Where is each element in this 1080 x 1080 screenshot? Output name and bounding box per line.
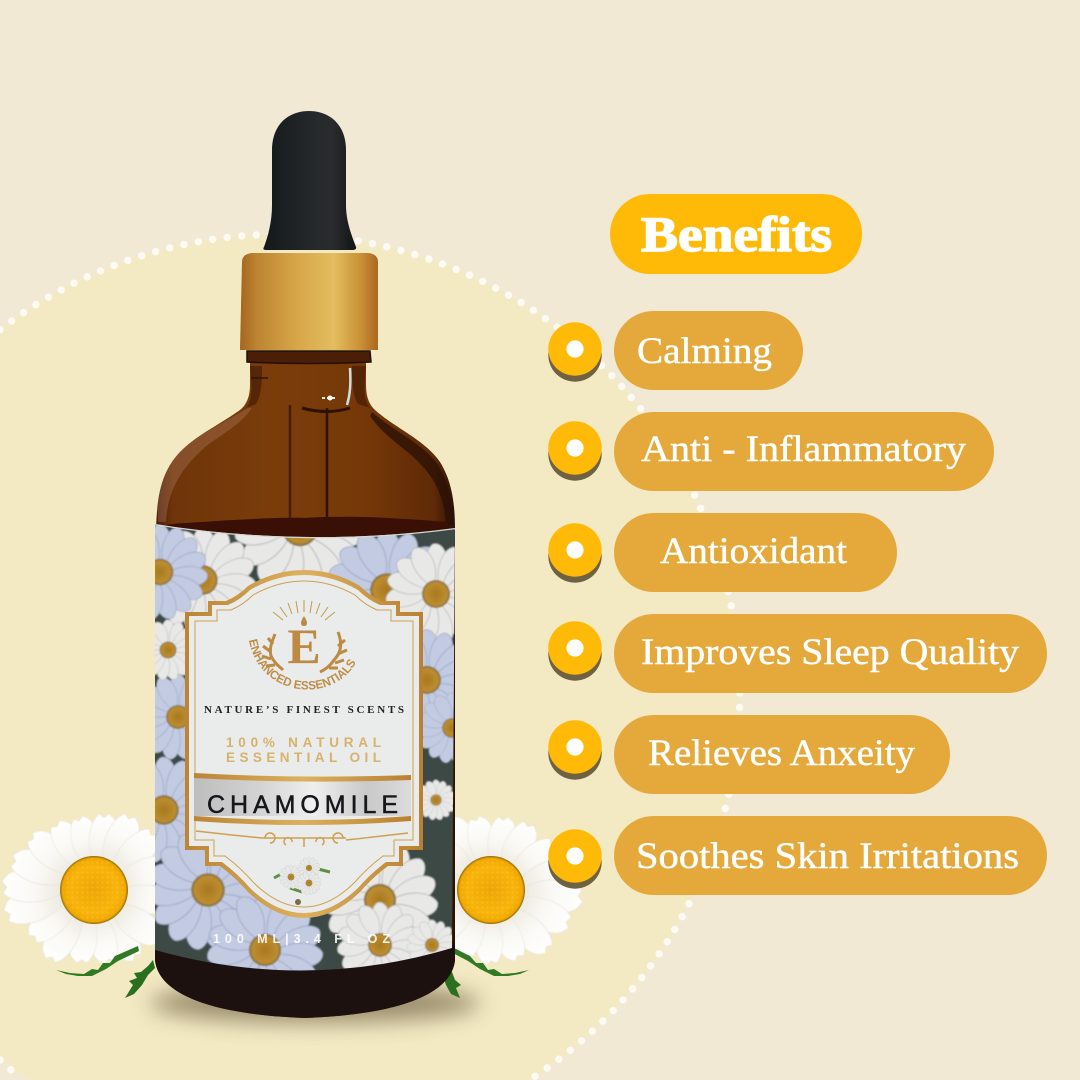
label: Calming — [637, 331, 772, 372]
benefit: relieves anxiety — [548, 715, 950, 794]
plaque label — [185, 570, 423, 918]
label: Antioxidant — [660, 531, 848, 572]
stem and leaf left — [56, 946, 155, 998]
gold ornament — [196, 831, 408, 847]
heading: benefits — [610, 194, 862, 274]
glass body — [155, 363, 455, 1018]
tagline: NATURE’S FINEST SCENTS — [204, 704, 404, 716]
benefit: anti-inflammatory — [548, 412, 994, 491]
benefit: improves sleep quality — [548, 614, 1047, 693]
benefit: antioxidant — [548, 513, 897, 592]
label: Relieves Anxeity — [648, 733, 916, 774]
petals left — [0, 809, 174, 968]
flower centre left — [60, 856, 128, 924]
bottle ground shadow — [150, 983, 480, 1023]
petals right — [406, 810, 585, 965]
heading: benefits: Benefits — [641, 206, 832, 262]
brand logo — [249, 600, 356, 690]
gold descriptor: ESSENTIAL OIL — [226, 750, 381, 765]
pill — [614, 614, 1047, 693]
bullet — [548, 720, 602, 780]
pill — [614, 513, 897, 592]
plaque white panel — [189, 575, 419, 913]
label: Improves Sleep Quality — [641, 632, 1020, 673]
product name band: CHAMOMILE — [207, 791, 398, 819]
pill — [614, 816, 1047, 895]
bullet — [548, 523, 602, 583]
dropper bulb — [263, 111, 356, 250]
benefit: calming — [548, 311, 803, 390]
pill — [614, 311, 803, 390]
logo rays — [273, 600, 335, 620]
dropper tube reflections — [251, 368, 350, 520]
bullet — [548, 829, 602, 889]
oil level band — [160, 517, 452, 538]
plaque inner line — [195, 581, 413, 907]
logo E: E — [287, 618, 321, 674]
pill — [614, 715, 950, 794]
glass base — [155, 945, 455, 1018]
gold collar — [240, 253, 378, 350]
benefit: soothes skin irritations — [548, 816, 1047, 895]
label: Anti - Inflammatory — [641, 429, 967, 470]
plaque gold frame — [185, 570, 423, 918]
logo wordmark: ENHANCED ESSENTIALS — [249, 639, 356, 690]
glass neck ring — [247, 351, 371, 364]
left chamomile flower — [0, 809, 174, 998]
gold descriptor: 100% NATURAL — [226, 735, 381, 750]
volume text: 100 ML|3.4 FL OZ — [213, 932, 390, 946]
printed floral wrap label — [155, 524, 455, 970]
glass shoulder sheen and shade — [158, 366, 453, 525]
label: Soothes Skin Irritations — [636, 836, 1019, 877]
bullet — [548, 621, 602, 681]
flower centre right — [457, 856, 525, 924]
logo sprigs — [262, 632, 347, 672]
gold descriptor — [226, 735, 381, 765]
bullet — [548, 421, 602, 481]
right chamomile flower — [406, 810, 585, 998]
product name band — [194, 773, 411, 825]
pill — [614, 412, 994, 491]
bullet — [548, 322, 602, 382]
logo drop — [301, 616, 307, 626]
dotted circle backdrop — [0, 234, 740, 1080]
bottle — [155, 111, 455, 1018]
small chamomile sprig — [274, 857, 330, 905]
stem and leaf right — [443, 946, 529, 998]
